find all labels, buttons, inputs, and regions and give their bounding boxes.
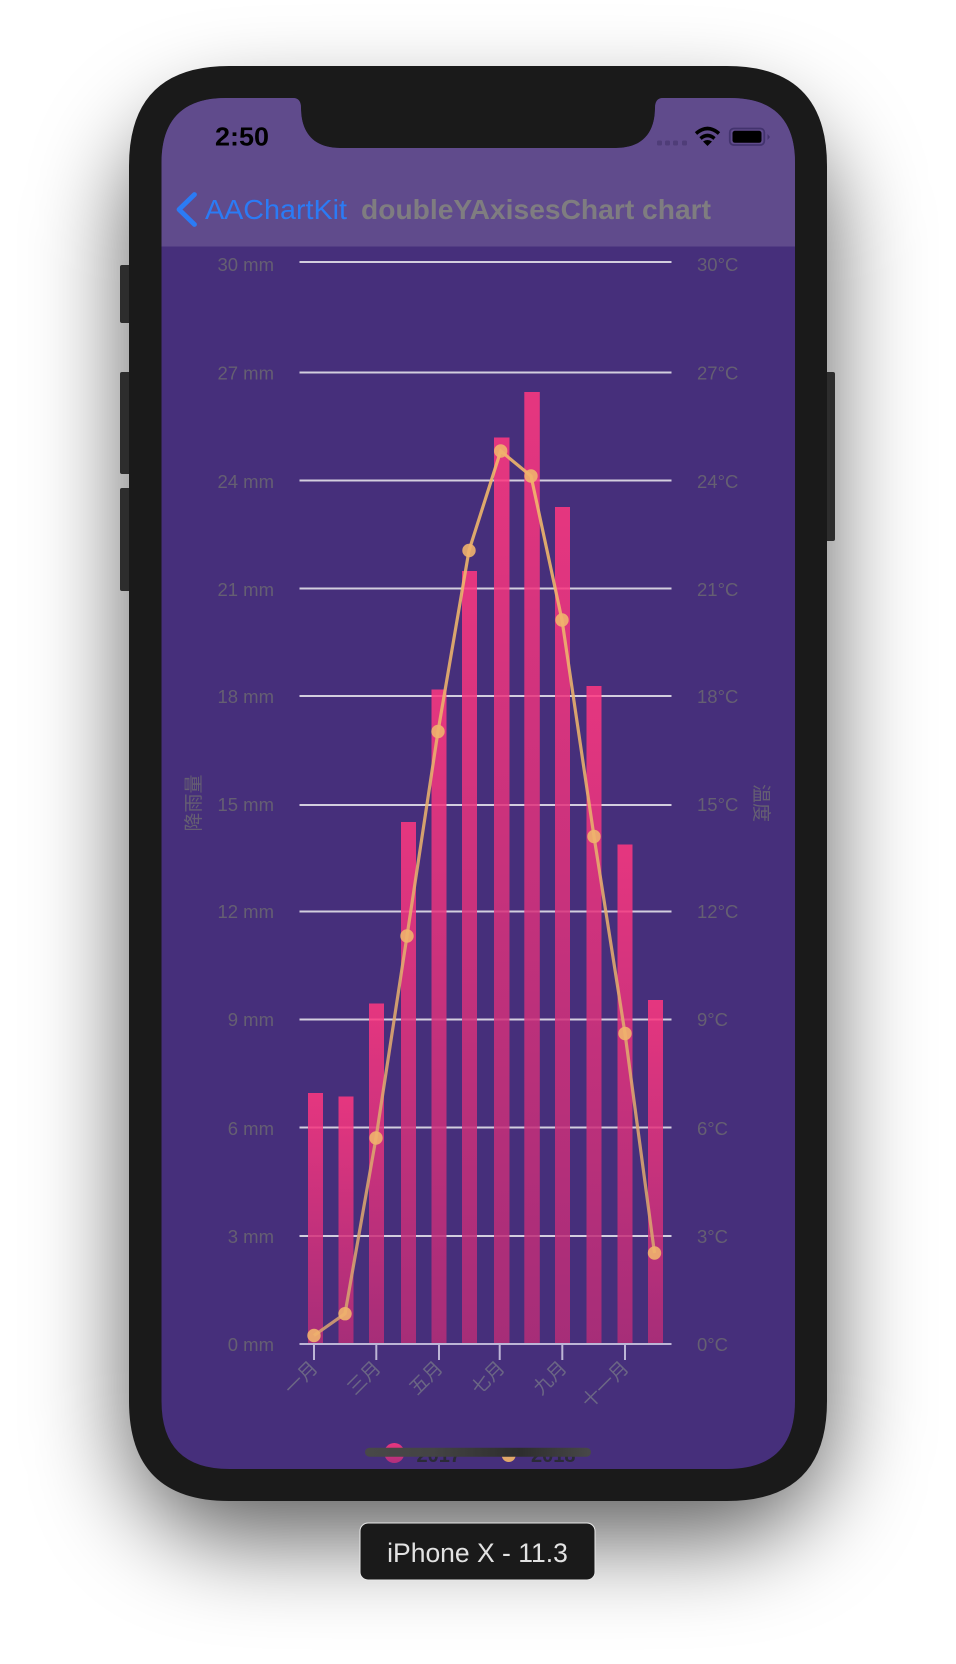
right axis labels: 0°C bbox=[697, 1334, 728, 1355]
device label: iPhone X - 11.3 bbox=[387, 1538, 568, 1568]
status time: 2:50 bbox=[215, 122, 269, 152]
x axis labels: 五月 bbox=[406, 1358, 448, 1399]
icon: wifi bbox=[696, 128, 719, 146]
legend: 2018 bbox=[531, 1445, 576, 1467]
right axis labels: 27°C bbox=[697, 362, 738, 384]
home indicator bbox=[365, 1448, 591, 1457]
legend: 2017 bbox=[416, 1445, 461, 1467]
phone shadow bbox=[129, 116, 827, 1538]
left side buttons bbox=[120, 265, 132, 591]
left axis labels: 27 mm bbox=[217, 362, 274, 384]
grid lines bbox=[300, 262, 672, 1236]
left axis title: 降雨量 bbox=[183, 774, 205, 832]
right axis labels: 30°C bbox=[697, 254, 738, 275]
screen bbox=[160, 96, 797, 1471]
signal dots bbox=[657, 140, 687, 146]
right axis title: 温度 bbox=[750, 784, 772, 822]
phone body bbox=[129, 66, 827, 1501]
x axis line bbox=[300, 1344, 672, 1360]
legend bbox=[385, 1443, 575, 1463]
x axis labels: 九月 bbox=[529, 1357, 572, 1399]
right side button bbox=[825, 372, 835, 541]
right axis labels: 9°C bbox=[697, 1009, 728, 1030]
line series 2018 bbox=[307, 444, 661, 1342]
x axis labels: 十一月 bbox=[578, 1357, 634, 1413]
left axis labels: 21 mm bbox=[217, 579, 274, 600]
left axis labels: 3 mm bbox=[228, 1226, 274, 1247]
left axis labels: 12 mm bbox=[217, 901, 274, 922]
right axis labels: 18°C bbox=[697, 686, 738, 707]
left axis labels: 30 mm bbox=[217, 254, 274, 275]
left axis labels bbox=[217, 254, 274, 1355]
right axis labels: 24°C bbox=[697, 471, 738, 492]
x axis labels: 一月 bbox=[281, 1358, 323, 1399]
right axis labels: 15°C bbox=[697, 794, 738, 815]
x axis labels: 七月 bbox=[467, 1357, 510, 1399]
left axis labels: 0 mm bbox=[228, 1334, 274, 1355]
left axis labels: 24 mm bbox=[217, 471, 274, 492]
chart background bbox=[160, 96, 797, 1471]
back chevron bbox=[179, 194, 194, 224]
left axis labels: 15 mm bbox=[217, 794, 274, 815]
right axis labels: 6°C bbox=[697, 1118, 728, 1139]
navigation title: doubleYAxisesChart chart bbox=[361, 194, 711, 225]
right axis labels bbox=[697, 254, 738, 1355]
device label bbox=[360, 1523, 595, 1580]
x axis labels: 三月 bbox=[344, 1358, 386, 1399]
icon: battery bbox=[730, 128, 770, 145]
x axis labels bbox=[287, 1361, 628, 1404]
right axis labels: 12°C bbox=[697, 901, 738, 922]
right axis labels: 3°C bbox=[697, 1226, 728, 1247]
back label: AAChartKit bbox=[205, 194, 347, 225]
navigation bar bbox=[160, 96, 797, 246]
left axis labels: 9 mm bbox=[228, 1009, 274, 1030]
right axis labels: 21°C bbox=[697, 579, 738, 600]
left axis labels: 6 mm bbox=[228, 1118, 274, 1139]
left axis labels: 18 mm bbox=[217, 686, 274, 707]
column series 2017 bbox=[308, 392, 663, 1344]
